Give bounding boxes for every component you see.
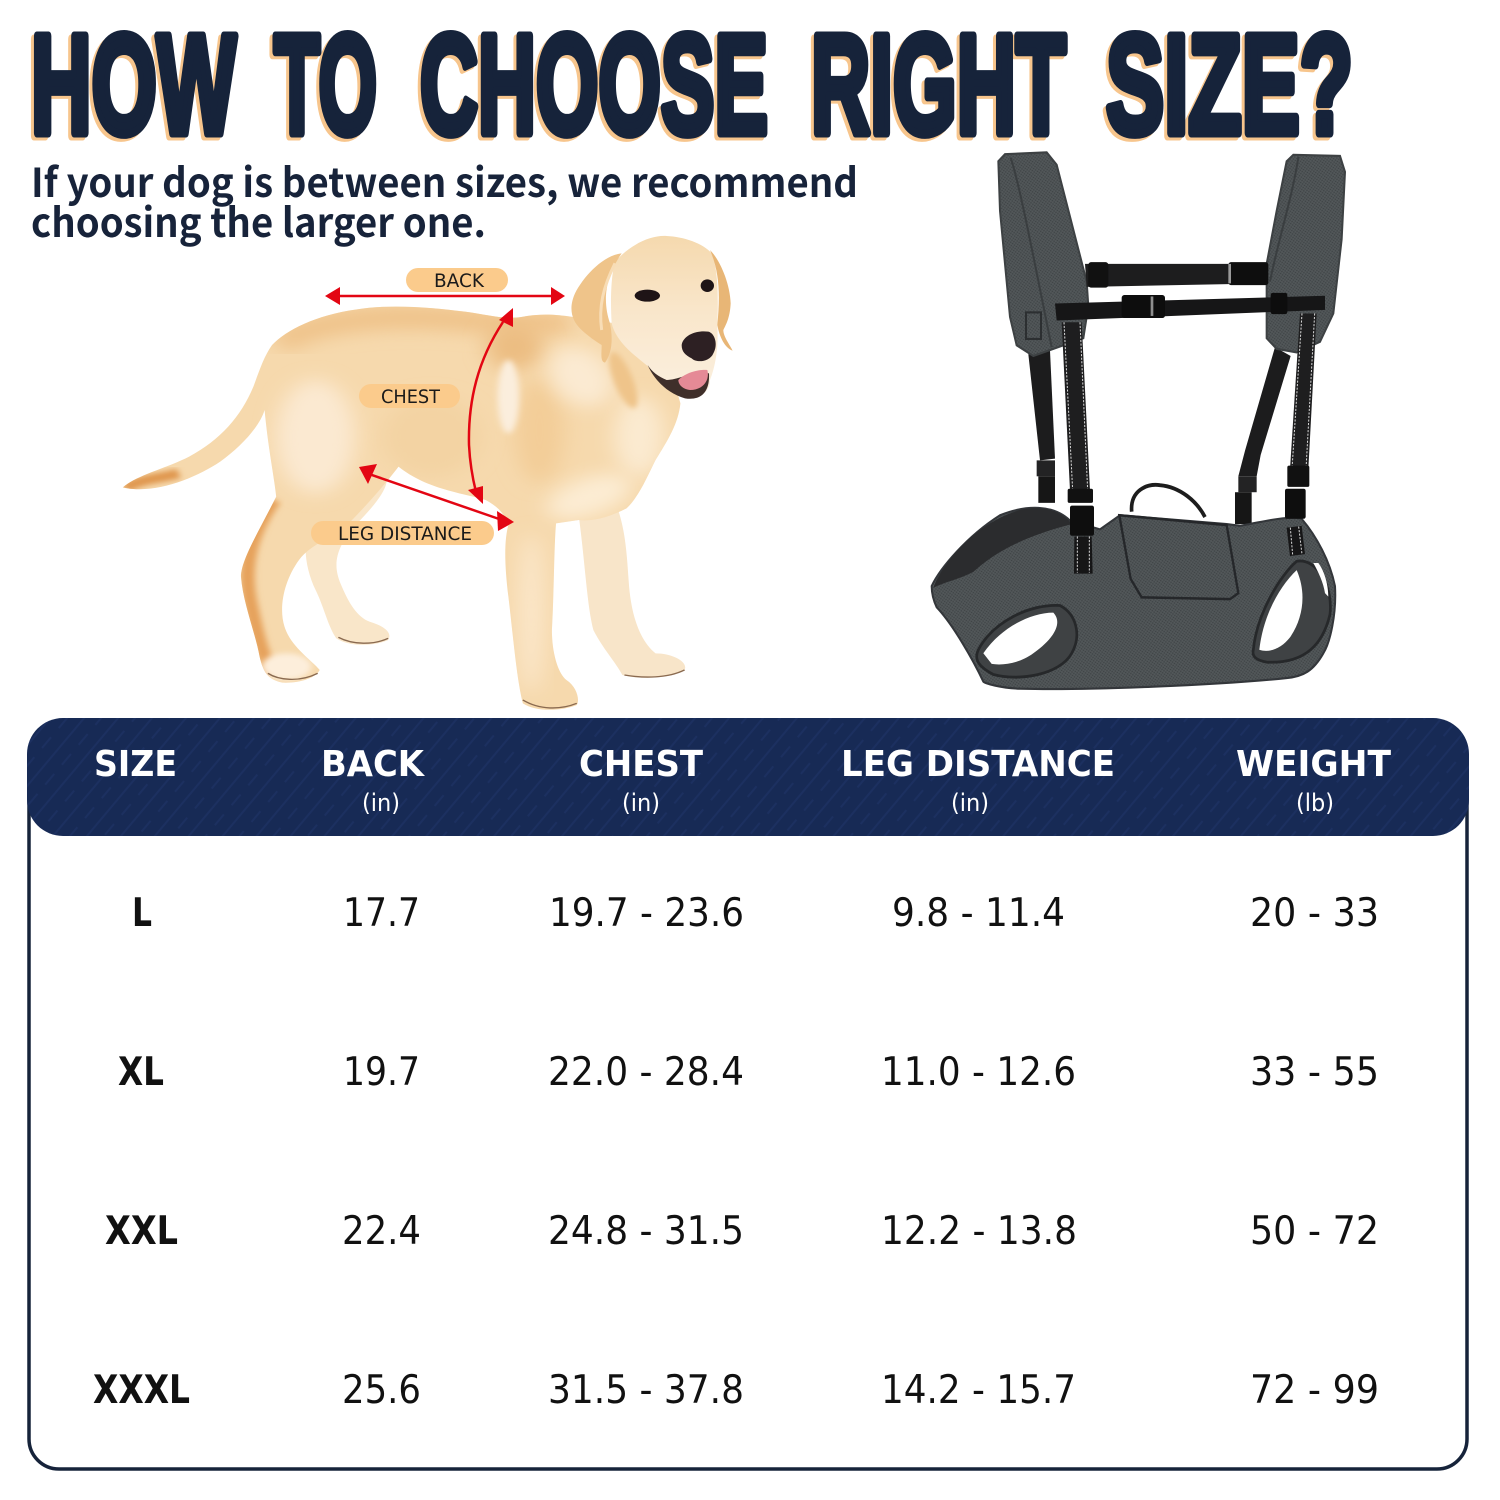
label: chest: CHEST — [381, 386, 440, 408]
header: leg distance: (in) — [951, 789, 989, 817]
header: weight: (lb) — [1296, 789, 1334, 817]
row XXXL: 72 - 99 — [1250, 1368, 1379, 1413]
harness flap — [1119, 515, 1238, 599]
row XL: 22.0 - 28.4 — [548, 1050, 744, 1095]
head shape — [611, 236, 718, 398]
table header band — [27, 718, 1469, 836]
title: RIGHT — [808, 8, 1063, 166]
row L: 19.7 - 23.6 — [549, 891, 744, 936]
right reflective strap — [1285, 313, 1317, 556]
far front leg — [579, 510, 685, 678]
title: HOW — [28, 8, 233, 166]
dog measurement illustration — [123, 236, 733, 710]
dog ear left — [571, 253, 622, 363]
title — [28, 5, 1353, 166]
subheading recommendation — [31, 151, 858, 249]
dog mouth — [648, 365, 709, 399]
row XL: XL — [118, 1050, 164, 1095]
table rows — [93, 891, 1379, 1413]
dog head — [571, 236, 733, 411]
row L: 9.8 - 11.4 — [892, 891, 1065, 936]
row XL: 33 - 55 — [1250, 1050, 1379, 1095]
harness inner lining — [933, 508, 1072, 588]
harness handle — [1132, 485, 1205, 517]
header: leg distance — [841, 744, 1115, 817]
dog body — [123, 307, 680, 710]
left shoulder pad — [998, 152, 1088, 356]
row L — [132, 891, 1379, 936]
row XL: 11.0 - 12.6 — [881, 1050, 1076, 1095]
header: back: (in) — [362, 789, 400, 817]
row XXXL: 25.6 — [342, 1368, 421, 1413]
header: weight — [1236, 744, 1391, 817]
row XXL: 12.2 - 13.8 — [881, 1209, 1077, 1254]
header: chest: (in) — [622, 789, 660, 817]
header: leg distance: LEG DISTANCE — [841, 744, 1115, 785]
ear crease — [601, 263, 615, 330]
header: back — [321, 744, 425, 817]
row XXL: 22.4 — [342, 1209, 421, 1254]
row XXXL — [93, 1368, 1379, 1413]
row XXL: XXL — [105, 1209, 178, 1254]
dog nose — [682, 331, 716, 361]
header: chest — [579, 744, 703, 817]
neck shadow — [603, 349, 643, 411]
dog tongue — [678, 370, 708, 390]
subheading recommendation: If your dog is between sizes, we recommend — [31, 151, 858, 209]
row XXXL: XXXL — [93, 1368, 190, 1413]
title: HOW — [31, 5, 236, 163]
title: SIZE? — [1106, 5, 1353, 163]
fur shading — [125, 317, 664, 693]
subheading recommendation: choosing the larger one. — [31, 191, 486, 249]
chest measurement arrow — [468, 308, 513, 504]
title: RIGHT — [811, 5, 1066, 163]
lower chest strap with buckle — [1055, 293, 1325, 321]
upper chest strap with buckle — [1085, 262, 1268, 288]
row XXL: 24.8 - 31.5 — [548, 1209, 744, 1254]
dog paws — [268, 637, 685, 708]
row L: 20 - 33 — [1250, 891, 1379, 936]
far hind leg — [306, 477, 389, 645]
row L: L — [132, 891, 152, 936]
label: chest — [359, 384, 460, 408]
size table panel — [29, 740, 1467, 1469]
dog eyes — [635, 290, 660, 302]
harness product illustration — [932, 152, 1345, 689]
header: weight: WEIGHT — [1236, 744, 1391, 785]
back measurement arrow — [325, 287, 565, 305]
right shoulder pad — [1267, 155, 1345, 352]
row XXXL: 14.2 - 15.7 — [881, 1368, 1076, 1413]
row XL: 19.7 — [343, 1050, 420, 1095]
rear black straps — [1028, 347, 1291, 524]
row XXL: 50 - 72 — [1250, 1209, 1379, 1254]
label: back — [406, 268, 508, 292]
title: CHOOSE — [420, 5, 768, 163]
header: size: SIZE — [94, 744, 177, 785]
harness leg hole left — [977, 605, 1077, 677]
label: leg distance — [311, 521, 494, 545]
leg distance arrow — [359, 464, 514, 531]
title: TO — [274, 5, 377, 163]
dog body and legs — [123, 307, 685, 710]
left reflective strap — [1062, 322, 1094, 574]
header: chest: CHEST — [579, 744, 703, 785]
label: leg distance: LEG DISTANCE — [338, 523, 472, 545]
harness body — [932, 508, 1335, 689]
dog ear right — [710, 250, 733, 351]
title: TO — [271, 8, 374, 166]
header: back: BACK — [321, 744, 425, 785]
row XL — [118, 1050, 1379, 1095]
row L: 17.7 — [343, 891, 420, 936]
row XXXL: 31.5 - 37.8 — [548, 1368, 744, 1413]
title: CHOOSE — [417, 8, 765, 166]
label: back: BACK — [434, 270, 485, 292]
title: SIZE? — [1103, 8, 1350, 166]
row XXL — [105, 1209, 1379, 1254]
harness leg hole right — [1253, 561, 1330, 662]
